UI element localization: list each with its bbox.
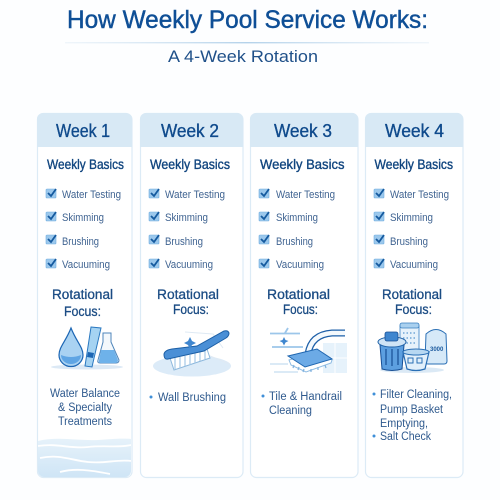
rotational focus heading (267, 287, 330, 317)
icon: tile and handrail brush (270, 328, 347, 373)
water balance text: Treatments (58, 416, 112, 428)
water balance text: & Specialty (58, 402, 112, 414)
checklist: Vacuuming (276, 259, 324, 271)
rotational focus heading: Rotational (267, 287, 330, 302)
checklist (46, 189, 121, 271)
rotational focus heading (382, 287, 442, 317)
filter and salt text (372, 389, 452, 443)
week 3 header (250, 113, 358, 147)
weekly basics heading: Weekly Basics (47, 157, 124, 172)
week 4 heading: Week 4 (385, 121, 444, 141)
title underline (65, 42, 429, 43)
rotational focus heading (52, 287, 113, 319)
checklist: Skimming (276, 212, 318, 224)
title: How Weekly Pool Service Works: (67, 6, 428, 34)
subtitle: A 4-Week Rotation (168, 47, 318, 66)
filter and salt text: Filter Cleaning, (380, 389, 452, 401)
filter and salt text: Salt Check (380, 431, 431, 443)
checklist: Water Testing (390, 189, 449, 201)
weekly basics heading: Weekly Basics (374, 157, 453, 172)
week 1 header (37, 113, 132, 147)
checklist: Water Testing (62, 189, 121, 201)
icon: filter, pump basket and salt (378, 323, 447, 373)
tile and handrail text (262, 391, 342, 417)
checklist: Brushing (165, 236, 203, 248)
checklist: Water Testing (276, 189, 335, 201)
panel: week 1 (37, 113, 132, 478)
checklist: Brushing (276, 236, 313, 248)
weekly basics heading: Weekly Basics (150, 157, 230, 172)
week 2 header (140, 113, 243, 147)
rotational focus heading: Focus: (64, 304, 101, 319)
tile and handrail text: Tile & Handrail (269, 391, 342, 403)
rotational focus heading: Rotational (157, 287, 219, 302)
water waves decoration (38, 439, 131, 477)
panel: week 4 (365, 113, 463, 478)
checklist: Vacuuming (62, 259, 110, 271)
checklist: Vacuuming (390, 259, 438, 271)
checklist: Vacuuming (165, 259, 213, 271)
checklist: Skimming (165, 212, 208, 224)
rotational focus heading: Rotational (52, 287, 113, 302)
icon: water drop, test strip and flask (51, 327, 123, 370)
panel: week 3 (250, 113, 358, 478)
week 3 heading: Week 3 (274, 121, 332, 141)
week 1 heading: Week 1 (56, 121, 110, 141)
rotational focus heading: Rotational (382, 287, 442, 302)
water balance text: Water Balance (50, 388, 120, 400)
checklist: Skimming (62, 212, 104, 224)
salt container: 3000 (430, 347, 444, 353)
water balance text (50, 388, 120, 428)
week 4 header (365, 113, 463, 147)
tile and handrail text: Cleaning (269, 405, 312, 417)
checklist: Brushing (390, 236, 428, 248)
filter and salt text: Emptying, (380, 418, 428, 430)
checklist (374, 189, 449, 271)
rotational focus heading: Focus: (283, 302, 318, 317)
rotational focus heading: Focus: (173, 302, 209, 317)
checklist (259, 189, 335, 271)
panel: week 2 (140, 113, 243, 478)
checklist: Brushing (62, 236, 99, 248)
filter and salt text: Pump Basket (380, 404, 444, 416)
rotational focus heading (157, 287, 219, 317)
pump basket (403, 349, 429, 370)
weekly basics heading: Weekly Basics (260, 157, 345, 172)
checklist: Skimming (390, 212, 433, 224)
filter cartridge (400, 323, 419, 352)
checklist: Water Testing (165, 189, 225, 201)
week 2 heading: Week 2 (161, 121, 219, 141)
wall brushing text: Wall Brushing (158, 392, 226, 404)
canister (378, 332, 406, 370)
rotational focus heading: Focus: (395, 302, 432, 317)
icon: wall brush (153, 331, 231, 376)
checklist (149, 189, 225, 271)
